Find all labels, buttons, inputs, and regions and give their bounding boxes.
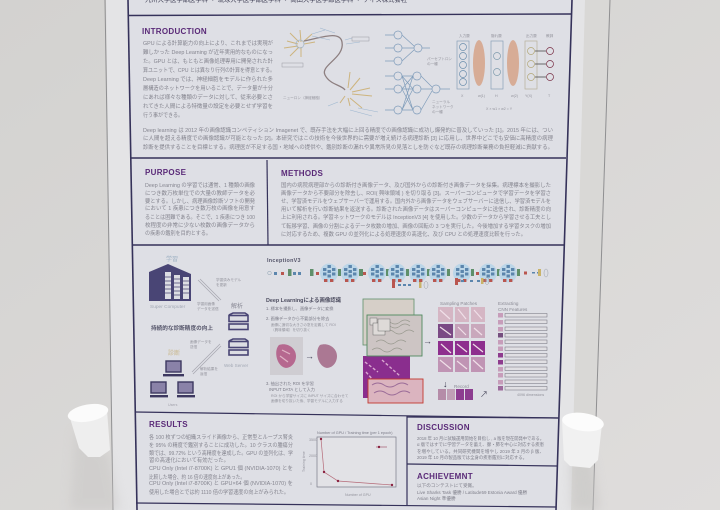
text block: introduction full width: 診断を提供することを目標とする。病理医が不足する国・地域への提供や、鑑別診断の漏れや異常所見の見落としを防ぐなど既存の病理診断業務の負担軽減に貢献する。	[143, 143, 553, 151]
diagram: autoencoder layers: X	[461, 94, 464, 98]
icon: super computer building	[149, 264, 191, 301]
text block: steps: （興味領域）を切り抜く	[271, 327, 311, 332]
chart: training time by number of gpu: 2000	[309, 454, 317, 458]
text block: discussion: 2018 年 10 月に試験運用開始を目指し , a 版を現在開発中である。	[417, 435, 544, 442]
label: users: Users	[168, 403, 178, 407]
text block: purpose: 要とする。しかし、病理画像診断ソフトの開発	[145, 197, 255, 205]
panel grid lines	[128, 0, 572, 510]
chart: training time by number of gpu: Number of GPU / Training time (per 1 epoch)	[317, 431, 393, 435]
text block: achievement	[417, 482, 527, 502]
diagram: autoencoder layers: 出力層	[526, 33, 537, 38]
diagram: autoencoder layers: Y(X)	[525, 94, 532, 98]
text block: introduction column: 層構造のネットワークを用いることで、データ量が十分	[143, 84, 273, 92]
illustration: neuron: ニューロン（神経細胞）	[283, 95, 323, 100]
text block: achievement: 以下のコンテストにて受賞。	[417, 482, 477, 489]
label: sampling patches: Sampling Patches	[440, 301, 478, 306]
diagram: autoencoder layers: 入力層	[459, 33, 470, 38]
text block: methods: 上に利用される。学習ネットワークのモデルは InceptionV3 [4] を使用した。少数のデータから学習させる工夫とし	[281, 213, 551, 221]
heading: introduction: INTRODUCTION	[142, 27, 207, 36]
panel: system diagram	[149, 255, 548, 407]
image: tissue roi	[317, 344, 337, 368]
text block: steps: 画像を切り抜いた後、学習モデルに入力する	[271, 398, 343, 403]
arrow: users to server	[192, 344, 221, 374]
text block: introduction column: 算ユニットで、CPU とは異なり行列の計算を得意とする。	[143, 66, 275, 74]
chart: training time by number of gpu: 0	[310, 482, 312, 486]
chart: training time by number of gpu: Number of GPU	[345, 493, 371, 497]
diagram: autoencoder layers: w(1)	[478, 94, 485, 98]
image: sampling patch grid	[438, 307, 485, 372]
text block: introduction column: Deep Learning では、神経細胞をモデルに作られた多	[143, 75, 273, 83]
diagram: autoencoder layers	[457, 33, 554, 111]
text block: introduction full width	[143, 126, 553, 151]
text block: introduction column	[143, 39, 275, 119]
label: extracting cnn features: CNN Features	[498, 307, 528, 312]
text block: methods: に対応するため、複数 GPU の並列化による処理速度の高速化、及び CPU との処理速度比較を行った。	[281, 230, 526, 238]
diagram: autoencoder layers: 教師	[546, 33, 554, 38]
caption: image send: 学習用画像	[197, 301, 215, 306]
text block: methods	[281, 181, 551, 238]
heading: inception v3: InceptionV3	[267, 258, 301, 264]
caption: return result	[200, 366, 218, 376]
label: extracting cnn features: Extracting	[498, 301, 519, 306]
panel: achievement	[417, 472, 527, 502]
text block: introduction column: た。GPU とは、もともと画像処理専用に開発された計	[143, 57, 273, 65]
text block: steps: 画像に適切な大きさの窓を定義して ROI	[271, 322, 336, 327]
right backing shade	[571, 0, 610, 510]
caption: model update: を更新	[216, 282, 227, 287]
heading: results: RESULTS	[149, 420, 188, 429]
text block: results: CPU Only (Intel i7-8700K) と GPU×64 個 (NVIDIA-1070) を	[149, 479, 293, 487]
diagram: neural network: の一種	[432, 109, 443, 114]
text block: steps: 1. 標本を撮影し、画像データに変換	[266, 305, 334, 312]
label: web server: Web Server	[224, 363, 249, 368]
heading: purpose: PURPOSE	[145, 168, 187, 177]
cup shadow: right	[570, 460, 600, 510]
text block: introduction column: 行う事ができる。	[143, 111, 183, 119]
label: extracting cnn features	[498, 301, 528, 312]
text block: results: 使用した場合とでは約 1110 倍の学習速度の向上がみられた。	[149, 488, 289, 496]
diagram: autoencoder layers: T	[548, 94, 551, 98]
text block: discussion	[417, 435, 544, 461]
text block: steps: INPUT DATA として入力	[269, 386, 315, 393]
panel: discussion	[417, 423, 544, 461]
diagram: perceptron	[385, 31, 453, 66]
diagram: autoencoder layers: H	[495, 94, 498, 98]
text block: introduction column: れてきた人間による特徴量の設定を必要とせず学習を	[143, 102, 273, 110]
arrow: to patches: →	[423, 336, 432, 346]
diagram: autoencoder layers: 隠れ層	[491, 33, 502, 38]
heading: learning: 学習	[166, 255, 178, 263]
text block: results: 習の高速化において有効だった。	[149, 456, 229, 464]
diagram: neural network	[385, 72, 454, 114]
diagram: perceptron: パーセプトロン	[427, 56, 453, 61]
cup shadow: left	[70, 430, 120, 510]
text block: introduction column: 難しかった Deep Learning が近年実用的なものになっ	[143, 48, 273, 56]
text block: introduction column: にあれば様々な種類のデータに対して、従来必要とさ	[143, 93, 273, 101]
text block: introduction full width: に人間を超える精度での画像認識が可能となった [2]。本研究ではこの技術を今後世界的に需要が増え続ける病理診断 [3] に応用し、世界中どこでも安価に高精度の病理	[143, 134, 553, 142]
text block: purpose: の疾患の鑑別を目的とする。	[145, 229, 211, 237]
text block: purpose: Deep Learning の学習では通常、1 種類の画像	[145, 181, 255, 189]
heading: analysis: 解析	[231, 302, 243, 310]
text block: discussion: を増やしている。共同研究機関を増やし 2019 年 3 月の β 版、	[417, 448, 544, 455]
image: low power micrographs	[363, 299, 423, 403]
chart: feature bars: 4096 dimensions	[517, 393, 544, 397]
text block: methods: 用いて解析を行い診断結果を返送する。診断された画像データはスーパーコンピュータに送信され、診断精度の向	[281, 205, 551, 213]
diagram: perceptron: の一種	[427, 61, 438, 66]
caption: return result: 返信	[200, 371, 208, 376]
text block: introduction column: GPU による計算能力の向上により、これまでは実現が	[143, 39, 273, 47]
caption: model update: 学習済みモデル	[216, 277, 242, 282]
text block: results: 各 100 枚ずつの組織スライド画像から、正常型とループス腎炎	[149, 433, 293, 441]
poster	[128, 0, 572, 510]
label: improve accuracy: 持続的な診断精度の向上	[151, 324, 213, 332]
icon: paper cup right	[561, 410, 605, 468]
panel: purpose	[145, 168, 255, 237]
text block: steps: ROI から学習サイズに INPUT サイズに合わせて	[271, 393, 349, 398]
caption: model update	[216, 277, 242, 287]
arrow: down to record: ↓	[443, 379, 448, 389]
caption: image send	[197, 301, 219, 311]
image: tissue slide	[270, 337, 303, 375]
diagram: autoencoder layers: w(2)	[511, 94, 518, 98]
text block: results: CPU Only (Intel i7-8700K) と GPU1 個 (NVIDIA-1070) とを	[149, 464, 293, 472]
diagram: neural network: ニューラル	[432, 99, 450, 104]
text block: results: 比較した場合、約 16 倍の速度向上があった。	[149, 473, 245, 481]
caption: send image	[190, 339, 212, 349]
text block: discussion: 2019 年 10 月の製品版では全身の疾患鑑別に対応する。	[417, 454, 527, 461]
arrow: crop: →	[305, 351, 314, 361]
caption: send image: 画像データを	[190, 339, 212, 344]
frame edge lines	[105, 0, 610, 510]
chart: inception network	[268, 264, 548, 288]
text block: purpose: において 1 疾患につき数万枚の画像を用意す	[145, 204, 255, 212]
text block: methods: 画像データから不要部分を除去し、ROI( 興味領域 ) を切り取る [3]。スーパーコンピュータで学習データを学習さ	[281, 189, 551, 197]
arrow: upload to super computer	[198, 279, 221, 301]
text block: methods: せ、学習済モデルをウェブサーバーで運用する。国内外から画像データをウェブサーバーに送信し、学習済モデルを	[281, 197, 551, 205]
text block: results: 類では、99.72% という高精度を達成した。GPU の並列化は、学	[149, 449, 293, 457]
text block: results: を 95% の精度で鑑別することに成功した。10 クラスの腫瘍分	[149, 441, 293, 449]
text block: methods: 国内の病院病理部からの診断付き画像データ、及び国外からの診断付き画像データを採集。病理標本を撮影した	[281, 181, 551, 189]
image: recorded patches	[438, 389, 473, 400]
heading: deep learning image recognition: Deep Learningによる画像認識	[266, 296, 342, 304]
chart: training time by number of gpu	[302, 431, 396, 497]
chart: training time by number of gpu: 3500	[309, 438, 317, 442]
heading: discussion: DISCUSSION	[417, 423, 470, 432]
text block: methods: て転移学習、画像の分割によるデータ枚数の増加、画像の回転の 3 つを実行した。今後増加する学習タスクの増加	[281, 222, 551, 230]
label: super computer: Super Computer	[150, 304, 186, 310]
heading: diagnosis: 診断	[168, 349, 180, 357]
icon: paper cup left	[66, 401, 110, 457]
heading: methods: METHODS	[281, 169, 323, 178]
text block: achievement: Asian Night 準優勝	[417, 495, 456, 502]
illustration: neuron	[282, 28, 378, 116]
caption: send image: 送信	[190, 344, 198, 349]
poster backing strip	[106, 0, 610, 510]
icon: user laptops	[150, 361, 195, 397]
text block: results	[149, 433, 293, 496]
label: record: Record	[454, 384, 469, 389]
text block: purpose: ることは困難である。そこで、1 疾患につき 100	[145, 213, 255, 221]
text block: steps: 2. 画像データから不要部分を除去	[266, 315, 329, 322]
caption: image send: データを送信	[197, 306, 219, 311]
diagram: autoencoder layers: X × w1 × w2 = Y	[486, 107, 513, 111]
text block: steps	[266, 305, 349, 403]
panel: methods	[281, 169, 551, 238]
text block: purpose	[145, 181, 255, 237]
panel: results	[149, 420, 396, 497]
arrow: to features: ↗	[480, 390, 488, 399]
diagram: neural network: ネットワーク	[432, 104, 454, 109]
chart: training time by number of gpu: Training time	[302, 451, 306, 472]
text block: purpose: につき数万枚単位での大量の教師データを必	[145, 189, 255, 197]
text block: introduction full width: Deep learning は 2012 年の画像認識コンペティション Imagenet で、既存手法を大幅に上回る精度での画像認識に成功し爆発的に普及していった [1]。2015 年には、つい	[143, 126, 553, 134]
text block: purpose: 枚程度の非常に少ない枚数の画像データから	[145, 221, 255, 229]
chart: feature bars	[498, 313, 547, 397]
text block: achievement: Live Sharks Task 優勝 / Latitude59 Estonia Award 優勝	[417, 489, 527, 496]
text block: steps: 3. 抽出された ROI を学習	[266, 380, 314, 387]
text block: discussion: α 版ではすでに学習データを蓄え、腺・肺を中心に対応する疾患	[417, 441, 544, 448]
panel: introduction	[142, 27, 554, 151]
icon: web servers	[229, 313, 248, 355]
heading: achievement: ACHIEVEMNT	[417, 472, 473, 481]
caption: return result: 解析結果を	[200, 366, 218, 371]
